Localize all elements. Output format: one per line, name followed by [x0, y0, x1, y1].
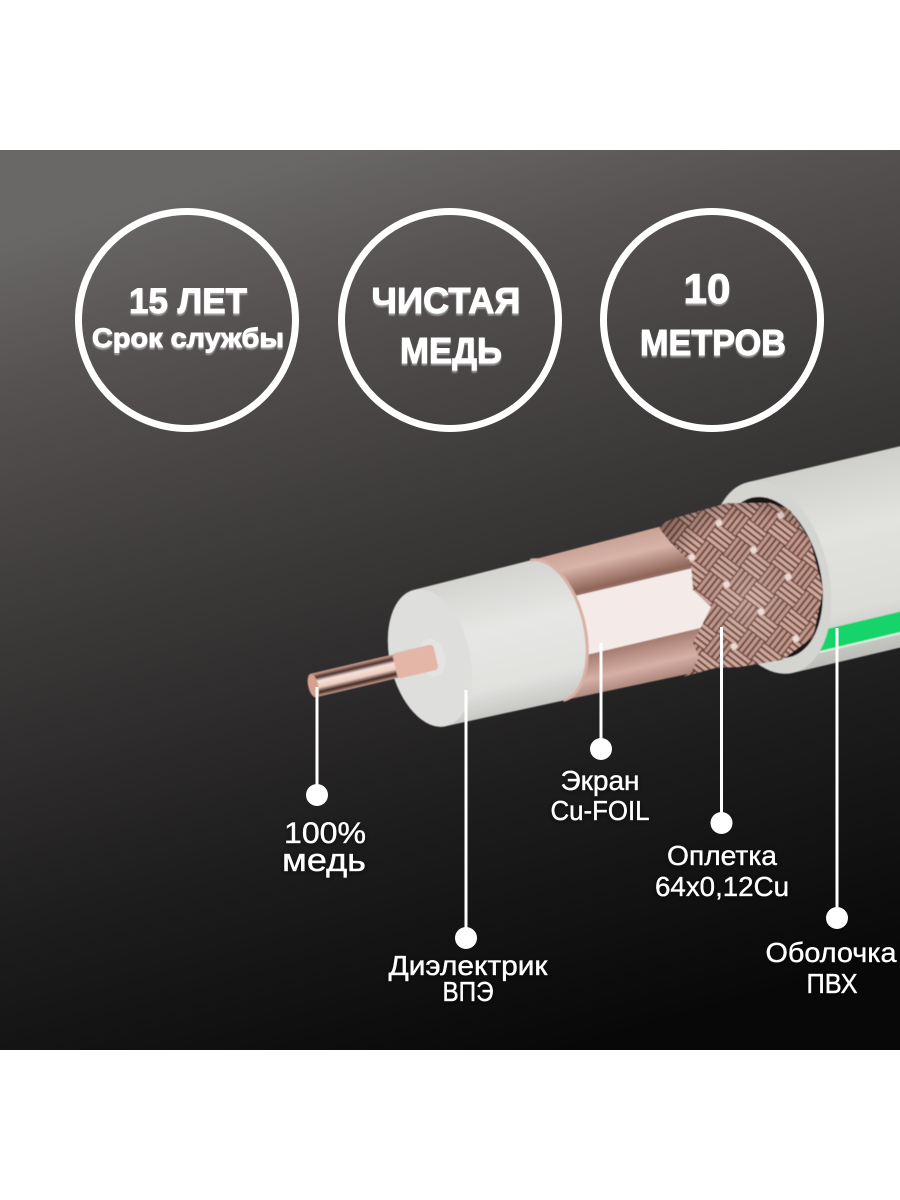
callout: dielectric: Диэлектрик: [388, 950, 548, 981]
callout: PVC sheath: Оболочка: [766, 937, 897, 968]
badge: service life: [78, 212, 296, 428]
callout: braid: 64x0,12Cu: [655, 871, 789, 902]
cable sheath and foil layers: [286, 413, 900, 782]
badge: service life: Срок службы: [92, 323, 284, 353]
callout: conductor: [282, 687, 366, 878]
callout: PVC sheath: [766, 628, 897, 999]
badge: 10 metres: МЕТРОВ: [640, 322, 786, 363]
callout: dielectric: [388, 690, 548, 1007]
badge: pure copper: [342, 212, 558, 428]
badge: pure copper: ЧИСТАЯ: [372, 280, 520, 321]
callout: dielectric: ВПЭ: [442, 976, 494, 1007]
dark gradient panel: [0, 150, 900, 1050]
callout: braid: [655, 627, 789, 902]
callout: conductor: медь: [282, 842, 366, 878]
coaxial cable illustration: [306, 446, 900, 728]
callout: foil screen: [550, 643, 650, 826]
callout: foil screen: Cu-FOIL: [550, 795, 650, 826]
callout: braid: Оплетка: [667, 840, 777, 871]
callout: foil screen: Экран: [560, 765, 640, 796]
badge: pure copper: МЕДЬ: [400, 330, 502, 371]
callout: conductor: 100%: [284, 817, 366, 850]
badge: service life: 15 ЛЕТ: [129, 282, 247, 321]
callout: PVC sheath: ПВХ: [806, 968, 858, 999]
copper braid: [659, 502, 824, 678]
badge: 10 metres: 10: [684, 265, 730, 312]
badge: 10 metres: [604, 212, 820, 428]
